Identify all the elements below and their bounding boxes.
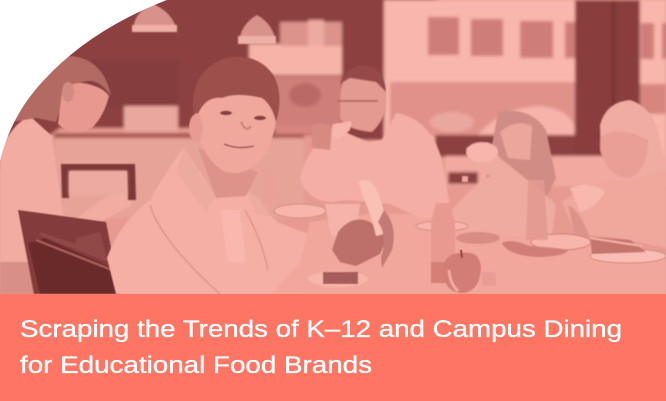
bottle xyxy=(431,203,455,283)
left window panel xyxy=(249,44,344,75)
counter xyxy=(54,133,304,139)
distant bottles xyxy=(526,180,548,240)
panel: title banner xyxy=(0,294,666,401)
title: for Educational Food Brands xyxy=(20,352,372,379)
person: man with glasses xyxy=(300,66,452,218)
photo: cafeteria background xyxy=(0,0,666,297)
person: girl drinking xyxy=(452,111,556,235)
right pillar xyxy=(575,0,641,158)
building xyxy=(384,0,576,140)
plates xyxy=(274,204,326,218)
boy eyes and mouth xyxy=(220,111,232,115)
window sill xyxy=(435,135,640,157)
chair behind xyxy=(61,164,136,200)
table items xyxy=(262,168,666,293)
boy shirt xyxy=(107,148,345,294)
person: girl on the left xyxy=(0,56,135,294)
cup xyxy=(325,204,360,236)
window pillar xyxy=(342,0,384,140)
boy hair xyxy=(193,57,280,122)
person: girl on the right xyxy=(562,100,666,248)
dark ceiling xyxy=(0,0,450,170)
small cup xyxy=(482,272,496,286)
small plate with food xyxy=(308,271,368,287)
title: Scraping the Trends of K–12 and Campus Dining xyxy=(20,316,622,343)
banana xyxy=(358,180,386,236)
long food roll xyxy=(502,241,568,257)
boy neck xyxy=(198,148,258,198)
apple xyxy=(442,253,481,293)
back bench xyxy=(445,156,666,186)
front chair xyxy=(18,210,120,294)
table xyxy=(272,214,666,294)
icon: hanging lamps xyxy=(132,4,276,44)
boy face xyxy=(195,78,278,173)
person: boy in the foreground xyxy=(107,57,345,294)
boy hand xyxy=(332,220,388,266)
sandwich xyxy=(590,237,646,254)
right window xyxy=(640,0,666,160)
white curved corner xyxy=(0,0,172,170)
